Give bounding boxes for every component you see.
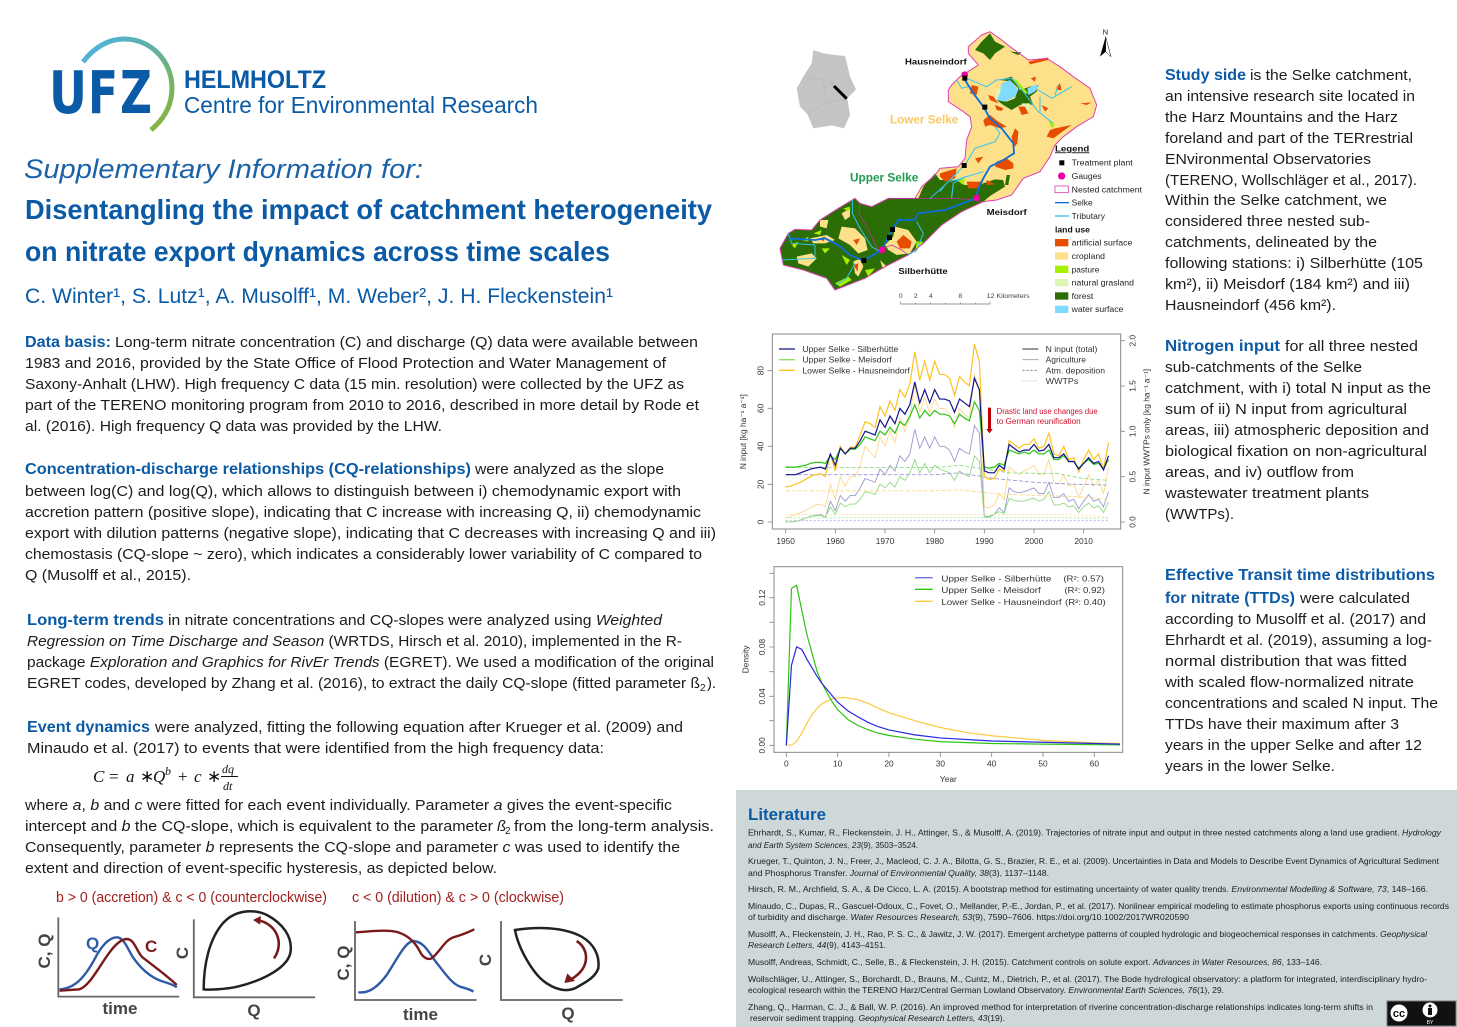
text block: hysteresis explanation: intercept and b the CQ-slope, which is equivalent to the parameter (25, 818, 493, 835)
map: legend: cropland (1072, 251, 1105, 261)
chart axes: 0.5 (1128, 471, 1138, 482)
map: scale bar: 0 (899, 293, 903, 300)
map: scale bar: 4 (929, 293, 933, 300)
text block: nitrogen input: biological fixation on non-agricultural (1165, 443, 1427, 460)
text block: study side: is the Selke catchment, (1250, 67, 1412, 84)
reference list (748, 828, 1449, 1023)
chart axes: 40 (755, 441, 765, 451)
text block: transit time distributions (1164, 567, 1438, 775)
reference list: Hirsch, R. M., Archfield, S. A., & De Cicco, L. A. (2015). A bootstrap method for estimating uncertainty of water quality trends. Environmental Modelling & Software, 73 , 148–166. (748, 884, 1428, 894)
equation: dt (223, 779, 233, 793)
text block: transit time distributions: normal distribution that was fitted (1165, 653, 1407, 670)
map: place labels: Hausneindorf (905, 57, 967, 67)
equation: = (109, 767, 119, 786)
map: north arrow (1100, 28, 1111, 57)
text block: transit time distributions: concentrations and scaled N input. The (1165, 695, 1438, 712)
map: place labels: Meisdorf (987, 207, 1027, 217)
text block: study side: Within the Selke catchment, we (1165, 192, 1387, 209)
map: legend: artificial surface (1072, 238, 1133, 248)
text block: study side: km²), ii) Meisdorf (184 km²) and iii) (1165, 276, 1410, 293)
chart axes: 30 (936, 758, 945, 768)
chart axes: 1970 (876, 536, 895, 546)
map: place labels: Upper Selke (850, 172, 919, 185)
text block: nitrogen input: sum of ii) N input from agricultural (1165, 401, 1407, 418)
chart axes: 2010 (1074, 536, 1093, 546)
chart axes: 0.00 (757, 737, 767, 753)
equation: + (178, 767, 188, 786)
chart axes: Density (741, 645, 751, 673)
text block: nitrogen input: areas, and iv) outflow from (1165, 464, 1354, 481)
reference list: Musolff, A., Fleckenstein, J. H., Rao, P. S. C., & Jawitz, J. W. (2017). Emergent archetype patterns of coupled hydrologic and biogeochemical responses in catchments. Geophysical (748, 929, 1428, 939)
logo: UFZ Helmholtz: F (88, 58, 118, 127)
text block: transit time distributions: were calculated (1299, 590, 1410, 607)
chart axes: Year (940, 774, 957, 784)
text block: CQ relationships: Q (Musolff et al., 2015). (25, 567, 191, 584)
map: legend (1055, 143, 1143, 314)
text block: hysteresis explanation: 2 (505, 826, 511, 837)
chart legend: N input types: N input (total) (1046, 344, 1098, 354)
text block: long-term trends: package Exploration and Graphics for RivEr Trends (EGRET). We used a modification of the original (27, 654, 714, 671)
title block: Disentangling the impact of catchment heterogeneity (25, 194, 712, 225)
text block: nitrogen input: sub-catchments of the Selke (1165, 359, 1362, 376)
equation: ∗ (207, 767, 221, 786)
text block: nitrogen input: (WWTPs). (1165, 506, 1234, 523)
map: scale bar: 12 Kilometers (987, 293, 1030, 300)
text block: long-term trends: EGRET codes, developed by Zhang et al. (2016), to extract the daily CQ-slope (fitted parameter ß (27, 675, 700, 692)
chart axes (741, 573, 1099, 784)
reference list: Research Letters, 44(9), 4143–4151. (748, 940, 886, 950)
chart axes: 0.12 (757, 589, 767, 606)
chart axes: 20 (755, 479, 765, 489)
map: north arrow: N (1103, 28, 1108, 37)
chart: dilution time series (334, 921, 477, 1024)
chart axes: 1960 (826, 536, 845, 546)
chart legend: (R²: 0.57) (1063, 574, 1104, 584)
chart: transit time distributions (741, 567, 1123, 784)
text block: data basis (25, 334, 700, 435)
chart legend: (R²: 0.92) (1064, 585, 1105, 595)
reference list: Minaudo, C., Dupas, R., Gascuel-Odoux, C., Fovet, O., Mellander, P.-E., Jordan, P., et al. (2017). Nonlinear empirical modeling to estimate phosphorus exports using continuous records (748, 901, 1449, 911)
map: scale bar (899, 293, 1030, 304)
chart legend: N input types: Atm. deposition (1046, 365, 1105, 375)
chart axes: 1.0 (1128, 425, 1138, 437)
title block: Supplementary Information for: (24, 154, 423, 184)
panel: literature (736, 790, 1457, 1027)
text block: CQ relationships: between log(C) and log(Q), which allows to distinguish between i) chemodynamic export with (25, 483, 681, 500)
logo: UFZ Helmholtz: U (49, 58, 87, 127)
chart axes: N input [kg ha⁻¹ a⁻¹] (738, 394, 748, 469)
map: legend: land use (1055, 224, 1090, 234)
chart: accretion time series (35, 917, 179, 1018)
chart axes: 0.04 (757, 688, 767, 704)
equation: dq (222, 762, 234, 776)
text block: nitrogen input: catchment, with i) total N input as the (1165, 380, 1431, 397)
text block: study side: catchments, delineated by the (1165, 234, 1377, 251)
text block: study side: Study side (1165, 67, 1246, 84)
callout: reunification (986, 407, 1098, 433)
map: legend: Tributary (1072, 211, 1106, 221)
equation: b (165, 764, 171, 778)
chart axes: 40 (987, 758, 997, 768)
text block: study side: Hausneindorf (456 km²). (1165, 297, 1336, 314)
icon: CC BY license badge: BY (1427, 1020, 1434, 1026)
map: Selke catchment (780, 28, 1143, 314)
chart: dilution time series: C, Q (334, 946, 353, 980)
chart legend: catchments: Upper Selke - Meisdorf (802, 355, 892, 365)
map: scale bar: 2 (914, 293, 918, 300)
chart curves (786, 585, 1120, 745)
text block: nitrogen input: Nitrogen input (1165, 338, 1280, 355)
reference list: reservoir sediment trapping. Geophysical Research Letters, 43(19). (750, 1013, 1005, 1023)
chart axes: 0 (784, 758, 789, 768)
logo: UFZ Helmholtz (49, 39, 538, 130)
map: legend: Selke (1072, 198, 1093, 208)
map: legend: Nested catchment (1072, 184, 1143, 194)
heading: hysteresis counterclockwise: b > 0 (accretion) & c < 0 (counterclockwise) (56, 890, 327, 906)
text block: CQ relationships: were analyzed as the slope (474, 461, 664, 478)
text block: hysteresis explanation: extent and direction of event-specific hysteresis, as depicted below. (25, 860, 497, 877)
title block: on nitrate export dynamics across time scales (25, 236, 610, 267)
text block: hysteresis explanation: from the long-term analysis. (514, 818, 714, 835)
text block: long-term trends: Regression on Time Discharge and Season (WRTDS, Hirsch et al. 2010), implemented in the R- (27, 633, 682, 650)
text block: event dynamics: Minaudo et al. (2017) to events that were identified from the high frequency data: (27, 740, 604, 757)
chart: accretion time series: Q (86, 934, 99, 953)
reference list: ecological research within the TERENO Harz/Central German Lowland Observatory. Environmental Earth Sciences, 76(1), 29. (748, 985, 1224, 995)
chart axes: 60 (1090, 758, 1099, 768)
text block: long-term trends: 2 (700, 683, 706, 694)
chart legend: N input types: WWTPs (1046, 376, 1078, 386)
chart legend: catchments: Lower Selke - Hausneindorf (802, 365, 911, 375)
reference list: Ehrhardt, S., Kumar, R., Fleckenstein, J. H., Attinger, S., & Musolff, A. (2019). Trajectories of nitrate input and output in three nested catchments along a land use gradient. Hydrology (748, 828, 1442, 838)
text block: CQ relationships: Concentration-discharge relationships (CQ-relationships) (25, 461, 471, 478)
text block: long-term trends (27, 612, 716, 694)
icon: CC BY license badge (1387, 1001, 1456, 1026)
chart axes: 1.5 (1128, 380, 1138, 392)
equation: C (93, 767, 105, 786)
text block: study side: the Harz Mountains and the Harz (1165, 109, 1398, 126)
chart axes: 1990 (975, 536, 994, 546)
chart legend: N input types (1022, 344, 1105, 386)
chart: counterclockwise loop: C (173, 947, 192, 959)
chart series (786, 344, 1108, 522)
reference list: Krueger, T., Quinton, J. N., Freer, J., Macleod, C. J. A., Bilotta, G. S., Brazier, R. E., et al. (2009). Uncertainties in Data and Models to Describe Event Dynamics of Agricultural Sediment (748, 856, 1440, 866)
callout: reunification: Drastic land use changes due (997, 407, 1098, 416)
chart axes: 80 (755, 366, 765, 375)
chart axes (738, 335, 1152, 546)
chart axes: 60 (755, 403, 765, 413)
text block: long-term trends: ). (707, 675, 716, 692)
chart: clockwise loop (476, 921, 623, 1023)
text block: long-term trends: Long-term trends (27, 612, 164, 629)
chart: dilution time series: time (403, 1005, 438, 1024)
text block: hysteresis explanation (24, 797, 714, 877)
chart legend (915, 574, 1106, 607)
text block: nitrogen input: for all three nested (1285, 338, 1418, 355)
heading: literature: Literature (748, 805, 826, 824)
text block: study side: (TERENO, Wollschläger et al., 2017). (1165, 172, 1417, 189)
title block: C. Winter¹, S. Lutz¹, A. Musolff¹, M. Weber², J. H. Fleckenstein¹ (25, 285, 613, 308)
text block: nitrogen input (1164, 338, 1431, 523)
chart: accretion time series: C (145, 937, 157, 956)
text block: data basis: al. (2016). High frequency Q data was provided by the LHW. (25, 418, 442, 435)
text block: transit time distributions: with scaled flow-normalized nitrate (1164, 674, 1414, 691)
text block: long-term trends: in nitrate concentrations and CQ-slopes were analyzed using Weighted (168, 612, 663, 629)
callout: reunification: to German reunification (997, 417, 1081, 426)
reference list: Zhang, Q., Harman, C. J., & Ball, W. P. (2016). An improved method for interpretation of riverine concentration-discharge relationships indicates long-term shifts in (748, 1002, 1373, 1012)
text block: transit time distributions: for nitrate (TTDs) (1165, 590, 1295, 607)
chart legend: catchments: Upper Selke - Silberhütte (802, 344, 899, 354)
text block: study side: following stations: i) Silberhütte (105 (1165, 255, 1423, 272)
reference list: Musolff, Andreas, Schmidt, C., Selle, B., & Fleckenstein, J. H. (2015). Catchment controls on solute export. Advances in Water Resources, 86, 133–146. (748, 957, 1322, 967)
map: place labels: Lower Selke (890, 114, 959, 127)
map: legend: Treatment plant (1072, 158, 1133, 168)
text block: hysteresis explanation: where a, b and c were fitted for each event individually. Parameter a gives the event-specific (24, 797, 673, 814)
equation: c (194, 767, 202, 786)
map: place labels (850, 57, 1027, 276)
chart axes: 2000 (1025, 536, 1044, 546)
text block: study side: foreland and part of the TERrestrial (1165, 130, 1413, 147)
text block: study side: considered three nested sub- (1165, 213, 1370, 230)
map: scale bar: 8 (958, 293, 962, 300)
logo: UFZ Helmholtz: HELMHOLTZ (184, 66, 326, 94)
title block (24, 154, 712, 308)
text block: event dynamics: were analyzed, fitting the following equation after Krueger et al. (2009) and (154, 719, 683, 736)
chart legend: N input types: Agriculture (1046, 355, 1086, 365)
text block: transit time distributions: years in the upper Selke and after 12 (1165, 737, 1422, 754)
map: legend: water surface (1071, 304, 1124, 314)
chart legend: Upper Selke - Meisdorf (941, 585, 1041, 595)
chart axes: 2.0 (1128, 335, 1138, 346)
logo: UFZ Helmholtz: Centre for Environmental Research (184, 92, 538, 118)
chart axes: 50 (1038, 758, 1048, 768)
reference list: of turbidity and discharge. Water Resources Research, 53(9), 7590–7606. https://doi.org/10.1002/2017WR020590 (748, 912, 1189, 922)
equation: ∗ (140, 767, 154, 786)
text block: data basis: Saxony-Anhalt (LHW). High frequency C data (15 min. resolution) were collected by the UFZ as (25, 376, 684, 393)
text block: event dynamics (27, 719, 683, 757)
chart legend: Lower Selke - Hausneindorf (941, 597, 1062, 607)
text block: hysteresis explanation: ß (497, 818, 506, 835)
logo: UFZ Helmholtz: Z (120, 58, 152, 127)
text block: study side: an intensive research site located in (1165, 88, 1415, 105)
map: land use (780, 32, 1097, 290)
map: gauges and treatment plants (861, 71, 987, 263)
equation (93, 762, 238, 793)
text block: data basis: 1983 and 2016, provided by the State Office of Flood Protection and Water Management of (25, 355, 667, 372)
text block: event dynamics: Event dynamics (27, 719, 150, 736)
text block: data basis: part of the TERENO monitoring program from 2010 to 2016, described in more detail by Rode et (25, 397, 700, 414)
text block: transit time distributions: years in the lower Selke. (1165, 758, 1335, 775)
text block: data basis: Data basis: (25, 334, 111, 351)
chart axes: 20 (884, 758, 894, 768)
map: rivers (782, 78, 1072, 285)
text block: hysteresis explanation: Consequently, parameter b represents the CQ-slope and parameter c was used to identify the (25, 839, 680, 856)
text block: nitrogen input: areas, iii) atmospheric deposition and (1165, 422, 1429, 439)
text block: study side: ENvironmental Observatories (1165, 151, 1371, 168)
map: legend: Gauges (1072, 171, 1102, 181)
text block: transit time distributions: TTDs have their maximum after 3 (1165, 716, 1399, 733)
text block: CQ relationships: accretion pattern (positive slope), indicating that C increase with increasing Q, ii) chemodynamic (25, 504, 702, 521)
chart axes: N input WWTPs only [kg ha⁻¹ a⁻¹] (1142, 369, 1152, 494)
chart: counterclockwise loop (173, 911, 315, 1020)
chart axes: 1980 (925, 536, 944, 546)
chart legend: (R²: 0.40) (1065, 597, 1106, 607)
text block: CQ relationships: export with dilution patterns (negative slope), indicating that C decreases with increasing Q and iii) (25, 525, 716, 542)
reference list: Wollschläger, U., Attinger, S., Borchardt, D., Brauns, M., Cuntz, M., Dietrich, P., et al. (2017). The Bode hydrological observatory: a platform for integrated, interdisciplinary hydro- (748, 974, 1427, 984)
map: place labels: Silberhütte (898, 266, 948, 276)
chart legend: catchments (779, 344, 911, 375)
map: Germany locator (797, 50, 856, 128)
chart axes: 0 (755, 519, 765, 524)
map: legend: natural grasland (1072, 278, 1134, 288)
chart: N input time series (738, 334, 1152, 546)
chart: accretion time series: C, Q (35, 934, 54, 968)
map: legend: pasture (1072, 264, 1100, 274)
chart axes: 0.08 (757, 639, 767, 655)
chart axes: 1950 (776, 536, 795, 546)
reference list: and Phosphorus Transfer. Journal of Environmental Quality, 38(3), 1137–1148. (748, 868, 1049, 878)
heading: hysteresis clockwise: c < 0 (dilution) & c > 0 (clockwise) (352, 890, 564, 906)
chart: accretion time series: time (103, 999, 137, 1018)
chart: clockwise loop: Q (561, 1004, 575, 1023)
text block: study side (1165, 67, 1423, 314)
equation: Q (153, 767, 165, 786)
map: legend: forest (1072, 291, 1094, 301)
chart: counterclockwise loop: Q (247, 1001, 261, 1020)
icon: CC BY license badge: cc (1393, 1008, 1405, 1020)
map: legend: Legend (1055, 143, 1089, 153)
text block: nitrogen input: wastewater treatment plants (1164, 485, 1369, 502)
chart: clockwise loop: C (476, 954, 495, 966)
text block: transit time distributions: according to Musolff et al. (2017) and (1165, 611, 1426, 628)
text block: transit time distributions: Ehrhardt et al. (2019), assuming a log- (1165, 632, 1432, 649)
text block: CQ relationships: chemostasis (CQ-slope ~ zero), which indicates a considerably lower variability of C compared to (25, 546, 702, 563)
reference list: and Earth System Sciences, 23(9), 3503–3524. (748, 840, 918, 850)
text block: CQ relationships (25, 461, 716, 584)
text block: transit time distributions: Effective Transit time distributions (1165, 567, 1435, 584)
text block: data basis: Long-term nitrate concentration (C) and discharge (Q) data were available between (115, 334, 698, 351)
chart axes: 10 (833, 758, 843, 768)
equation: a (126, 767, 134, 786)
chart legend: Upper Selke - Silberhütte (941, 574, 1052, 584)
chart axes: 0.0 (1128, 516, 1138, 528)
